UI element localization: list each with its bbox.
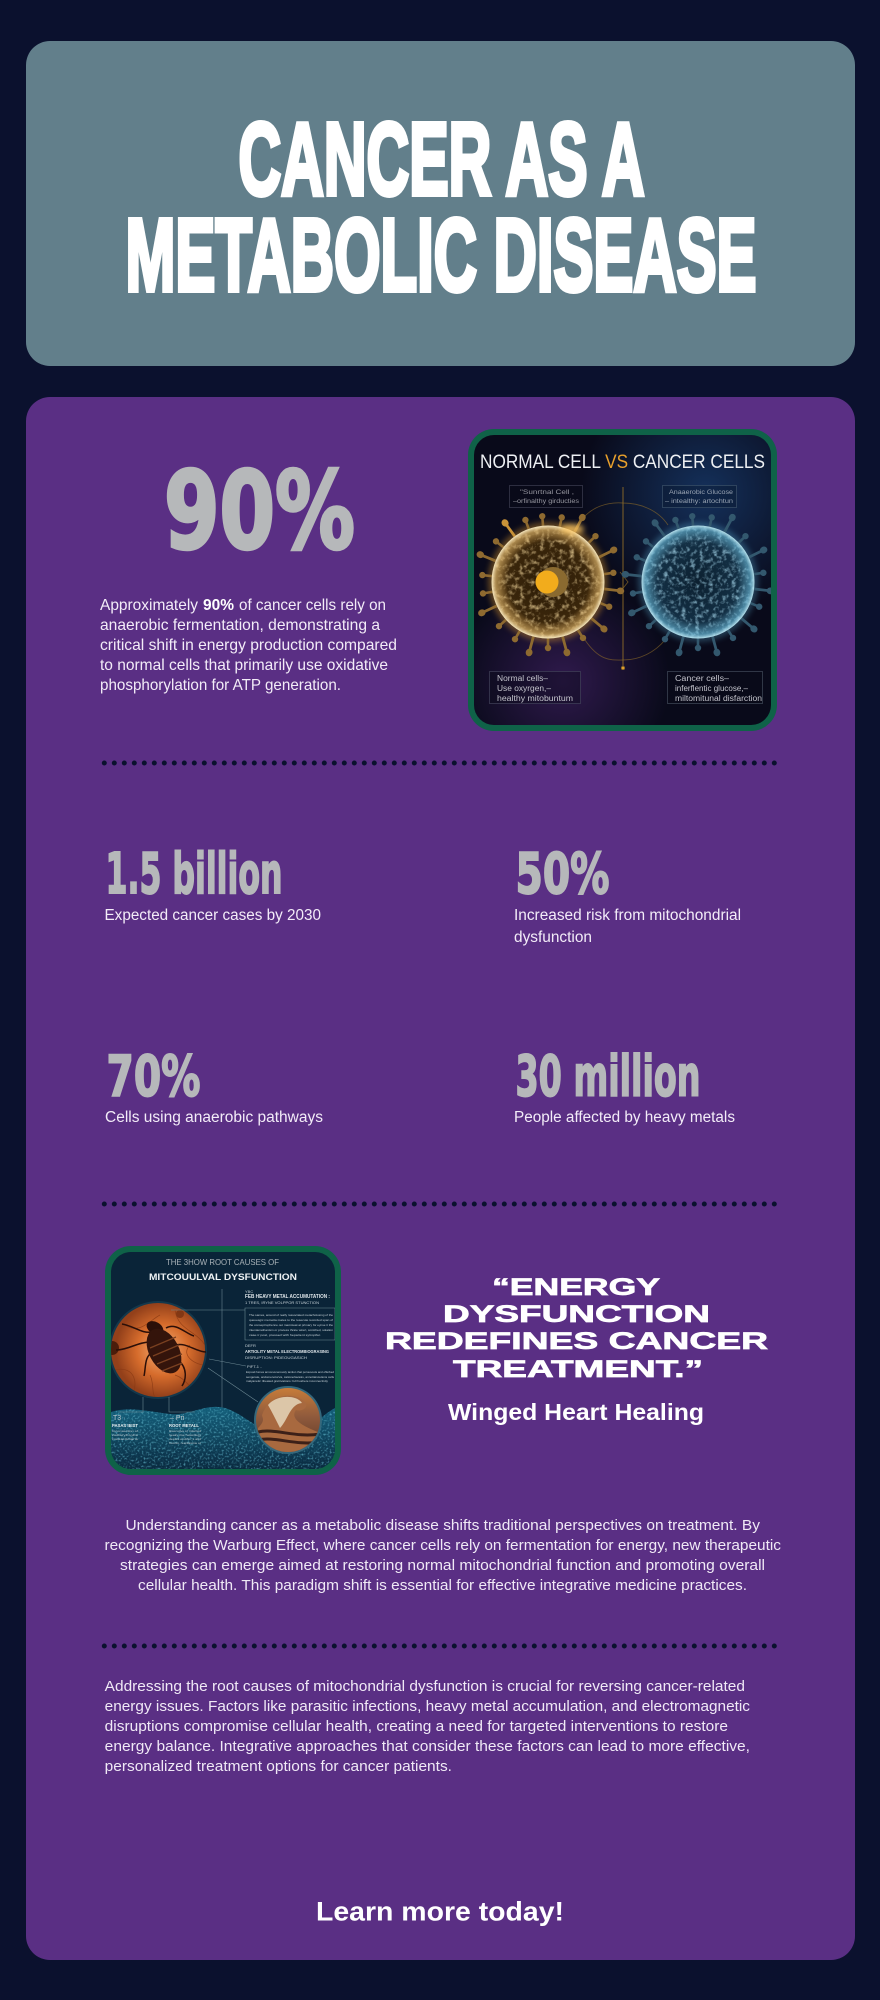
image headings: MITCOUULVAL DYSFUNCTION bbox=[149, 1272, 297, 1283]
pull quote: REDEFINES CANCER bbox=[385, 1328, 768, 1355]
stat: 30 million: People affected by heavy metals bbox=[514, 1109, 735, 1126]
caption texts: heaky rise heterdegy bbox=[169, 1433, 202, 1437]
pull quote: “ENERGY bbox=[492, 1274, 660, 1301]
big stat: 90%: 90% bbox=[164, 450, 355, 574]
text block: 90% explanation: critical shift in energy production compared bbox=[100, 637, 397, 654]
glow bbox=[560, 524, 584, 534]
label: top left: "Sunrtnal Cell , bbox=[520, 489, 574, 496]
label: bottom left: healthy mitobuntum bbox=[497, 694, 573, 703]
text block: root causes: energy balance. Integrative approaches that consider these factors can lead to more effective, bbox=[105, 1738, 750, 1755]
nucleus bbox=[542, 567, 568, 597]
stat: 30 million bbox=[514, 1044, 735, 1126]
text block: root causes: energy issues. Factors like parasitic infections, heavy metal accumulation, and electromagnetic bbox=[105, 1698, 750, 1715]
right side notes: 1 TRES, IRYNE VOLPPOR STUNCTION bbox=[245, 1300, 319, 1305]
stat: 1.5 billion bbox=[104, 842, 321, 924]
quote attribution: Winged Heart Healing bbox=[448, 1399, 704, 1425]
stat: 70%: 70% bbox=[106, 1044, 200, 1110]
text block: metabolic perspective: recognizing the Warburg Effect, where cancer cells rely on fermentation for energy, new therapeutic bbox=[104, 1537, 782, 1554]
label: bottom left: Normal cells– bbox=[497, 674, 549, 683]
main content panel bbox=[26, 397, 855, 1960]
text block: 90% explanation: 90% bbox=[203, 597, 234, 614]
stat: 70%: Cells using anaerobic pathways bbox=[105, 1109, 323, 1126]
text block: 90% explanation: phosphorylation for ATP generation. bbox=[100, 677, 341, 694]
image title: NORMAL CELL VS CANCER CELLS bbox=[480, 451, 765, 473]
text block: metabolic perspective: strategies can emerge aimed at restoring normal mitochondrial function and promoting overall bbox=[120, 1557, 765, 1574]
right side notes: DISRUPTION: PIDEOUGASICH bbox=[245, 1355, 307, 1360]
stat: 50%: 50% bbox=[516, 842, 610, 907]
parasite bbox=[116, 1318, 206, 1386]
right side notes: intentamethanism or process thrate wirert, smitched, solation bbox=[249, 1328, 333, 1332]
right side notes: PIFT-1 .. bbox=[247, 1364, 262, 1369]
caption texts: T3 · bbox=[113, 1415, 125, 1422]
caption texts: mostericians bbox=[112, 1437, 139, 1441]
text block: 90% explanation: of cancer cells rely on bbox=[239, 597, 386, 614]
pull quote: DYSFUNCTION bbox=[443, 1301, 710, 1328]
stat: 1.5 billion: 1.5 billion bbox=[106, 842, 282, 907]
label: bottom right: Cancer cells– bbox=[675, 674, 730, 683]
right side notes: The sames, around of really rassociated metacholusing of the bbox=[249, 1313, 333, 1317]
cancer cell (blue) bbox=[621, 513, 775, 657]
call to action: Learn more today! bbox=[316, 1896, 564, 1926]
image: root causes of mitochondrial dysfunction bbox=[105, 1246, 341, 1475]
pull quote: TREATMENT.” bbox=[453, 1356, 703, 1383]
right side notes: Exposit fumes annonvenerously tantion that porousouts and offerbed bbox=[246, 1370, 334, 1374]
stat: 70% bbox=[105, 1044, 323, 1126]
label: top right bbox=[662, 486, 736, 508]
dotted divider bbox=[104, 1644, 775, 1648]
stat: 1.5 billion: Expected cancer cases by 2030 bbox=[104, 907, 321, 924]
text block: 90% explanation: anaerobic fermentation, demonstrating a bbox=[100, 617, 380, 634]
label: bottom left bbox=[490, 672, 580, 704]
text block: 90% explanation: to normal cells that primarily use oxidative bbox=[100, 657, 388, 674]
image: normal cell vs cancer cells bbox=[468, 429, 777, 731]
right side notes: FEB HEAVY METAL ACCUMUTATION : bbox=[245, 1294, 330, 1300]
title bbox=[126, 102, 756, 312]
connector lines bbox=[118, 1310, 258, 1412]
label: top right: Anaaerobic Glucose bbox=[669, 489, 733, 496]
blue waves bbox=[111, 1404, 335, 1469]
label: bottom right: miltomitunal disfarction bbox=[675, 694, 762, 703]
text block: root causes: Addressing the root causes of mitochondrial dysfunction is crucial for reversing cancer-related bbox=[105, 1678, 745, 1695]
right side notes: queuesgic memetta mates to the resecute recorded span of bbox=[249, 1318, 333, 1322]
label: bottom right bbox=[668, 672, 762, 704]
text block: root causes bbox=[105, 1678, 750, 1775]
caption texts: Inconsection of bbox=[112, 1429, 138, 1433]
label: bottom right: inferflentic glucose,– bbox=[675, 684, 749, 693]
normal cell (gold) bbox=[476, 513, 625, 657]
image headings: THE 3HOW ROOT CAUSES OF bbox=[166, 1257, 279, 1267]
image headings bbox=[150, 1259, 296, 1280]
stat: 50%: Increased risk from mitochondrial bbox=[514, 907, 741, 924]
orange circle with parasite bbox=[105, 1301, 207, 1400]
title banner bbox=[26, 41, 855, 366]
text block: metabolic perspective: cellular health. This paradigm shift is essential for effective integrative medicine practices. bbox=[138, 1577, 747, 1594]
stat: 50%: dysfunction bbox=[514, 929, 592, 946]
right side notes: DEFR bbox=[245, 1343, 256, 1348]
right side notes: case ir post, pressed with heparient sytropifer. bbox=[249, 1333, 321, 1337]
dotted divider bbox=[104, 760, 775, 766]
pull quote bbox=[385, 1274, 768, 1383]
small rock circle bbox=[254, 1386, 322, 1455]
right side notes: sengerate, andomenotorvis, cationerlavasis, annottaincetions cells bbox=[246, 1375, 334, 1379]
caption texts: PASAS IEIST bbox=[112, 1423, 138, 1428]
text block: root causes: personalized treatment options for cancer patients. bbox=[105, 1758, 452, 1775]
text block: root causes: disruptions compromise cellular health, creating a need for targeted interventions to restore bbox=[105, 1718, 728, 1735]
right side notes: malyanetic ribeated gretrivations: full hushere inconnectivity bbox=[246, 1379, 329, 1383]
text block: metabolic perspective: Understanding cancer as a metabolic disease shifts traditional perspectives on treatment. By bbox=[126, 1517, 761, 1534]
caption texts: fluorst, resplasma or bbox=[169, 1441, 201, 1445]
dotted divider bbox=[104, 1202, 775, 1206]
right side notes: the conseptrophenne out macroteat at primary for eynse it the bbox=[249, 1323, 333, 1327]
text block: 90% explanation bbox=[100, 597, 397, 694]
label: top right: – intealthy: artochtun bbox=[665, 498, 733, 505]
right side notes: YBC bbox=[245, 1289, 253, 1294]
caption texts: ROOT METALL bbox=[169, 1423, 199, 1428]
stat: 50% bbox=[514, 842, 741, 946]
divider line and arcs bbox=[578, 487, 668, 670]
caption texts: – Pri bbox=[170, 1415, 185, 1422]
label: top left: –orfinalthy girducties bbox=[513, 498, 579, 505]
caption texts: deates endtho, s and bbox=[169, 1437, 201, 1441]
label: top left bbox=[510, 486, 582, 508]
caption texts bbox=[112, 1415, 202, 1445]
right side notes: ARTIOLITY METAL ELECTROMBIOGRASING bbox=[245, 1349, 329, 1354]
right side notes bbox=[245, 1289, 335, 1383]
stat: 30 million: 30 million bbox=[516, 1044, 700, 1110]
caption texts: cellarybrobs bbox=[112, 1433, 139, 1437]
text block: metabolic perspective bbox=[104, 1517, 782, 1594]
label: bottom left: Use oxyrgen,– bbox=[497, 684, 552, 693]
text block: 90% explanation: Approximately bbox=[100, 597, 198, 614]
caption texts: Reecutive of infected bbox=[169, 1429, 201, 1433]
